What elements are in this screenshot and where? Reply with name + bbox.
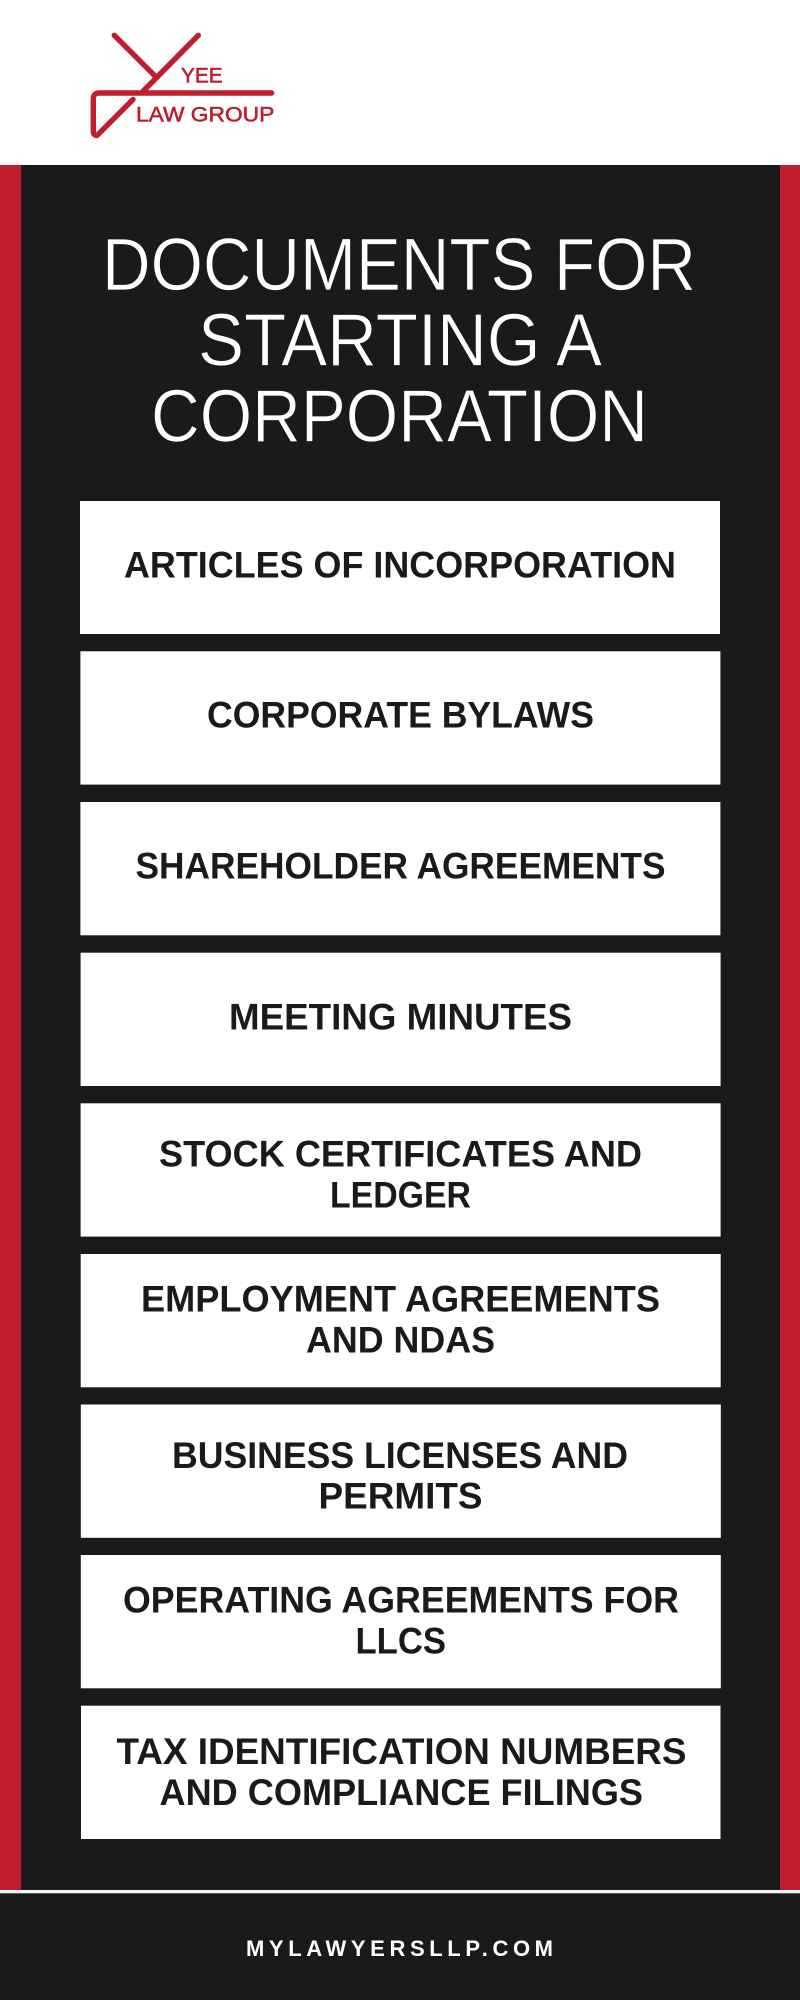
footer divider: [0, 1890, 800, 1893]
logo text: YEE: YEE: [181, 64, 223, 87]
card: corporate bylaws: [80, 651, 720, 785]
footer background: [0, 1893, 800, 2000]
card: operating agreements for LLCs: [81, 1555, 721, 1688]
card: employment agreements and NDAs: [81, 1254, 721, 1387]
card: operating agreements for LLCs: OPERATING AGREEMENTS FOR: [123, 1579, 679, 1621]
card: employment agreements and NDAs: EMPLOYMENT AGREEMENTS: [141, 1278, 660, 1320]
card: shareholder agreements: [80, 802, 720, 935]
left red side bar: [0, 165, 21, 1890]
card: articles of incorporation: ARTICLES OF INCORPORATION: [124, 544, 676, 586]
logo: Yee Law Group: [93, 35, 274, 135]
card: tax identification numbers and compliance filings: AND COMPLIANCE FILINGS: [160, 1771, 643, 1813]
card: shareholder agreements: SHAREHOLDER AGREEMENTS: [136, 844, 666, 886]
card: articles of incorporation: [80, 501, 720, 634]
header background: [0, 0, 800, 165]
card: tax identification numbers and compliance filings: TAX IDENTIFICATION NUMBERS: [116, 1730, 686, 1772]
card: employment agreements and NDAs: AND NDAS: [306, 1318, 495, 1360]
card: operating agreements for LLCs: LLCS: [356, 1620, 446, 1662]
title: STARTING A: [198, 299, 603, 382]
card: business licenses and permits: [81, 1404, 721, 1538]
card: stock certificates and ledger: [81, 1103, 721, 1237]
right red side bar: [780, 165, 800, 1890]
title: CORPORATION: [151, 375, 648, 458]
card: meeting minutes: [81, 953, 721, 1086]
title: [102, 223, 696, 458]
card: meeting minutes: MEETING MINUTES: [229, 996, 572, 1038]
footer website: MYLAWYERSLLP.COM: [246, 1936, 553, 1961]
title: DOCUMENTS FOR: [102, 223, 696, 306]
card: business licenses and permits: BUSINESS LICENSES AND: [172, 1434, 628, 1476]
logo mark: [93, 35, 272, 135]
logo text: LAW GROUP: LAW GROUP: [136, 104, 274, 127]
card: corporate bylaws: CORPORATE BYLAWS: [207, 694, 594, 736]
card: stock certificates and ledger: STOCK CERTIFICATES AND: [159, 1133, 642, 1175]
card: tax identification numbers and compliance filings: [81, 1706, 720, 1839]
card: stock certificates and ledger: LEDGER: [330, 1174, 471, 1216]
card: business licenses and permits: PERMITS: [318, 1475, 482, 1517]
